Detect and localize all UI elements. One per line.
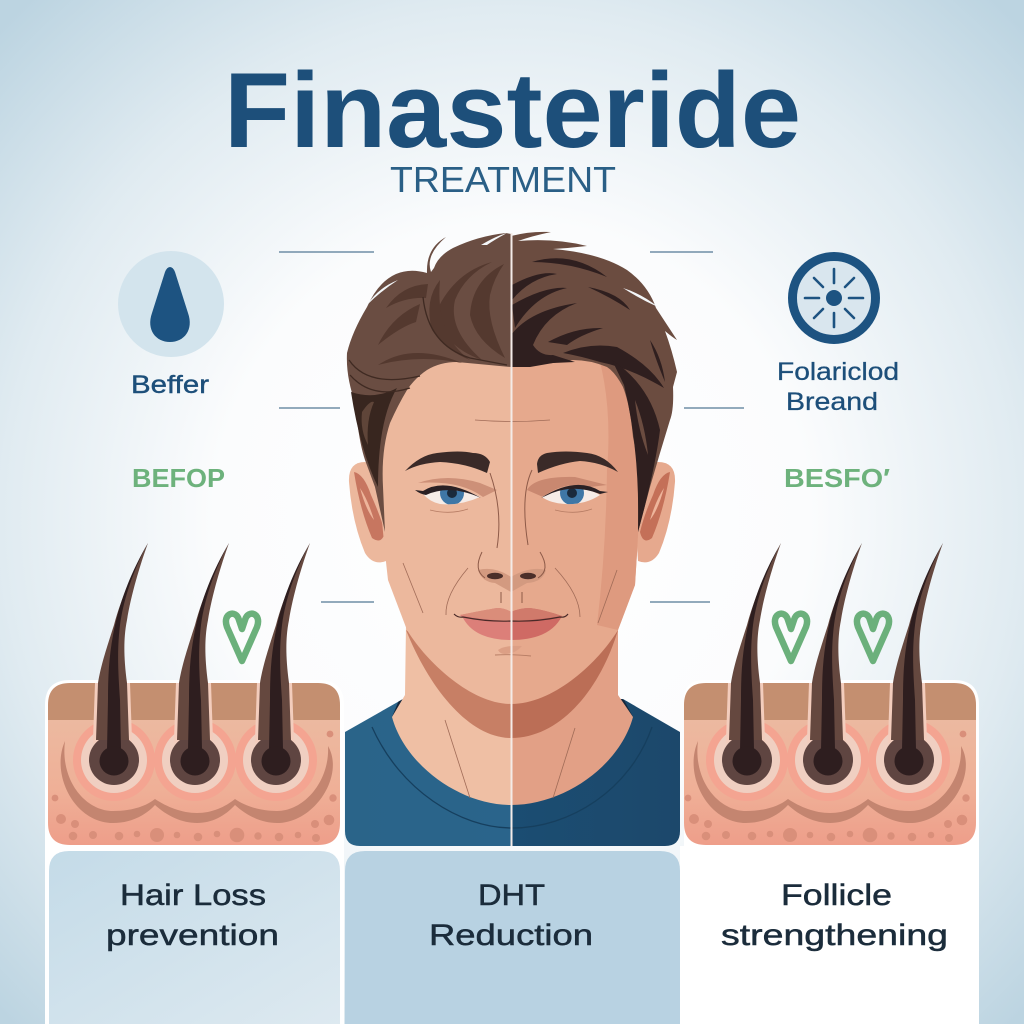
hair follicles — [73, 543, 317, 801]
neck — [392, 625, 633, 805]
callout lines — [279, 252, 744, 602]
icon: follicle sun dial — [792, 256, 876, 340]
right label: Folariclod Breand: Folariclod — [777, 358, 899, 386]
card text: DHT — [478, 879, 545, 912]
cheek shade — [597, 360, 640, 630]
right eye — [527, 477, 608, 512]
left label: BEFOP: BEFOP — [132, 463, 225, 493]
card text: Hair Loss — [120, 879, 266, 912]
hair follicles — [706, 543, 950, 801]
chin mark — [495, 646, 531, 656]
center divider — [510, 233, 512, 846]
title: Finasteride — [224, 50, 801, 170]
panel: follicle strengthening text: Follicle — [781, 879, 892, 912]
panel: right follicles — [680, 543, 979, 1024]
card text — [429, 879, 593, 952]
panel: DHT reduction card — [345, 851, 680, 1024]
card text: prevention — [106, 919, 279, 952]
face wrinkles — [403, 420, 617, 798]
skin layers — [48, 683, 340, 845]
left label: Beffer: Beffer — [131, 371, 209, 399]
right label: Folariclod Breand: Breand — [786, 388, 878, 416]
shirt — [345, 695, 680, 846]
hair right half — [511, 232, 677, 532]
panel: left follicles — [45, 543, 344, 1024]
eyebrows — [405, 452, 618, 473]
card text: Reduction — [429, 919, 593, 952]
hair left half — [347, 233, 511, 532]
right label: BESFO: BESFO′ — [784, 463, 890, 493]
card text — [106, 879, 279, 952]
icon: water drop — [118, 251, 224, 357]
panel: follicle strengthening text: strengthening — [721, 919, 948, 952]
face right half — [511, 340, 640, 704]
left eye — [415, 478, 497, 512]
right label: Folariclod Breand — [777, 358, 899, 416]
subtitle: TREATMENT — [390, 159, 616, 200]
dermis band and pores — [52, 731, 337, 842]
skin layers — [684, 683, 976, 845]
icon: heart checks — [775, 614, 889, 661]
panel: follicle strengthening text — [721, 879, 948, 952]
face left half — [378, 340, 511, 704]
jaw shadow — [406, 630, 618, 738]
panel backing — [45, 680, 344, 1024]
dermis band and pores — [685, 731, 970, 842]
ears — [349, 462, 675, 562]
panel: hair loss prevention card — [49, 851, 340, 1024]
mouth — [454, 608, 568, 640]
panel backing — [680, 680, 979, 1024]
icon: heart check — [226, 614, 258, 661]
nose — [478, 470, 546, 603]
portrait: before and after face — [345, 232, 680, 846]
